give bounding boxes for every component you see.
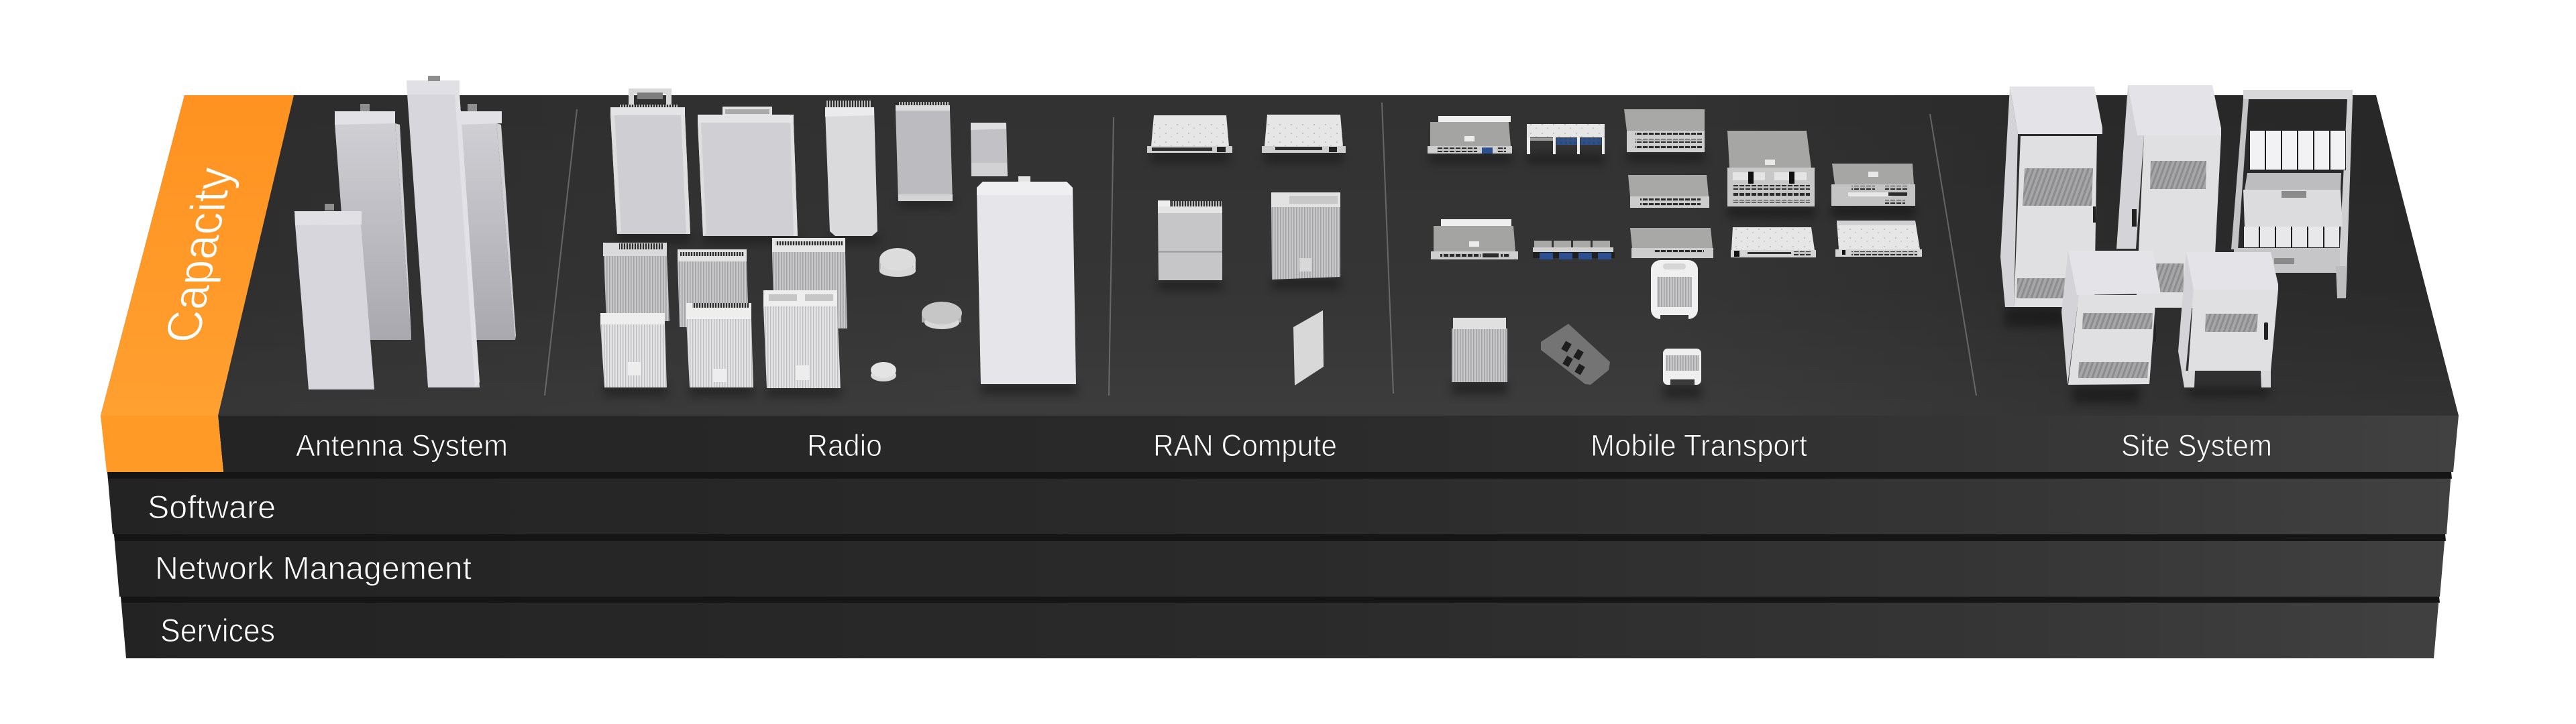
slab: Network Management <box>114 534 2446 597</box>
antenna: front left <box>294 204 374 389</box>
compute: slanted card <box>1293 310 1324 385</box>
router: T7 <box>1431 219 1518 259</box>
radio: large white panel <box>977 176 1076 384</box>
label: Services: Services <box>160 613 275 649</box>
slab: Software <box>107 472 2452 534</box>
group: radio <box>600 91 1076 388</box>
compute: box 1 <box>1158 200 1222 280</box>
outdoor: dark unit <box>1541 324 1610 385</box>
router: T10 <box>1731 227 1816 257</box>
label: RAN Compute: RAN Compute <box>1153 428 1337 463</box>
radio: ribbed unit 2 <box>678 249 749 327</box>
platform top surface <box>101 95 2459 416</box>
outdoor: white tall <box>1651 260 1698 320</box>
radio: disc large <box>922 302 962 329</box>
radio: tall slim <box>825 101 877 236</box>
outdoor: ribbed box <box>1452 318 1507 382</box>
radio: panel 2 <box>698 108 798 236</box>
group: site system <box>2000 85 2353 387</box>
label: Antenna System: Antenna System <box>296 428 508 463</box>
label: Site System: Site System <box>2121 428 2272 463</box>
group: antenna system <box>294 76 516 389</box>
cabinet: tall left <box>2000 86 2102 307</box>
label: Radio: Radio <box>807 428 882 463</box>
group: shadows under devices <box>604 152 2269 404</box>
label: Software: Software <box>148 490 276 526</box>
slab: Services <box>121 597 2440 658</box>
battery rack <box>2231 90 2353 298</box>
capacity band <box>101 95 294 472</box>
outdoor: small white <box>1663 349 1701 385</box>
cabinet: small right <box>2178 252 2278 387</box>
cabinet: small left <box>2061 251 2160 385</box>
router: T4 <box>1727 131 1815 206</box>
radio: small box <box>971 123 1008 176</box>
router: T5 <box>1831 164 1915 206</box>
compute: unit 1 <box>1147 115 1232 153</box>
router: T1 <box>1428 116 1512 154</box>
radio: panel 1 <box>610 91 690 234</box>
antenna: back right <box>456 104 516 340</box>
dividers <box>545 103 1976 396</box>
label: Capacity: Capacity <box>155 167 244 343</box>
radio: disc tiny <box>871 362 896 381</box>
radio: medium panel <box>896 102 953 201</box>
router: T11 <box>1835 221 1922 257</box>
panel: capacity platform <box>101 95 2459 472</box>
router: T6 <box>1628 175 1709 208</box>
label: Network Management: Network Management <box>155 551 472 587</box>
router: T8 <box>1533 241 1615 259</box>
radio: ribbed unit 1 <box>603 243 669 321</box>
platform front face <box>218 416 2459 472</box>
radio: ribbed unit 4 <box>600 313 667 387</box>
router: T3 <box>1624 109 1705 152</box>
compute: box 2 <box>1271 192 1340 280</box>
router: T9 <box>1630 228 1713 258</box>
radio: ribbed unit 6 <box>763 290 841 388</box>
radio: ribbed unit 5 <box>686 303 753 387</box>
group: mobile transport <box>1428 109 1922 385</box>
antenna: back left <box>335 104 411 340</box>
cabinet: tall centre <box>2116 85 2221 308</box>
radio: ribbed unit 3 <box>772 238 847 328</box>
group: RAN compute <box>1147 115 1346 385</box>
label: Mobile Transport: Mobile Transport <box>1591 428 1807 463</box>
router: T2 <box>1527 124 1605 154</box>
antenna: tall centre <box>407 76 480 387</box>
compute: unit 2 <box>1262 115 1346 153</box>
radio: disc small top <box>879 248 916 277</box>
